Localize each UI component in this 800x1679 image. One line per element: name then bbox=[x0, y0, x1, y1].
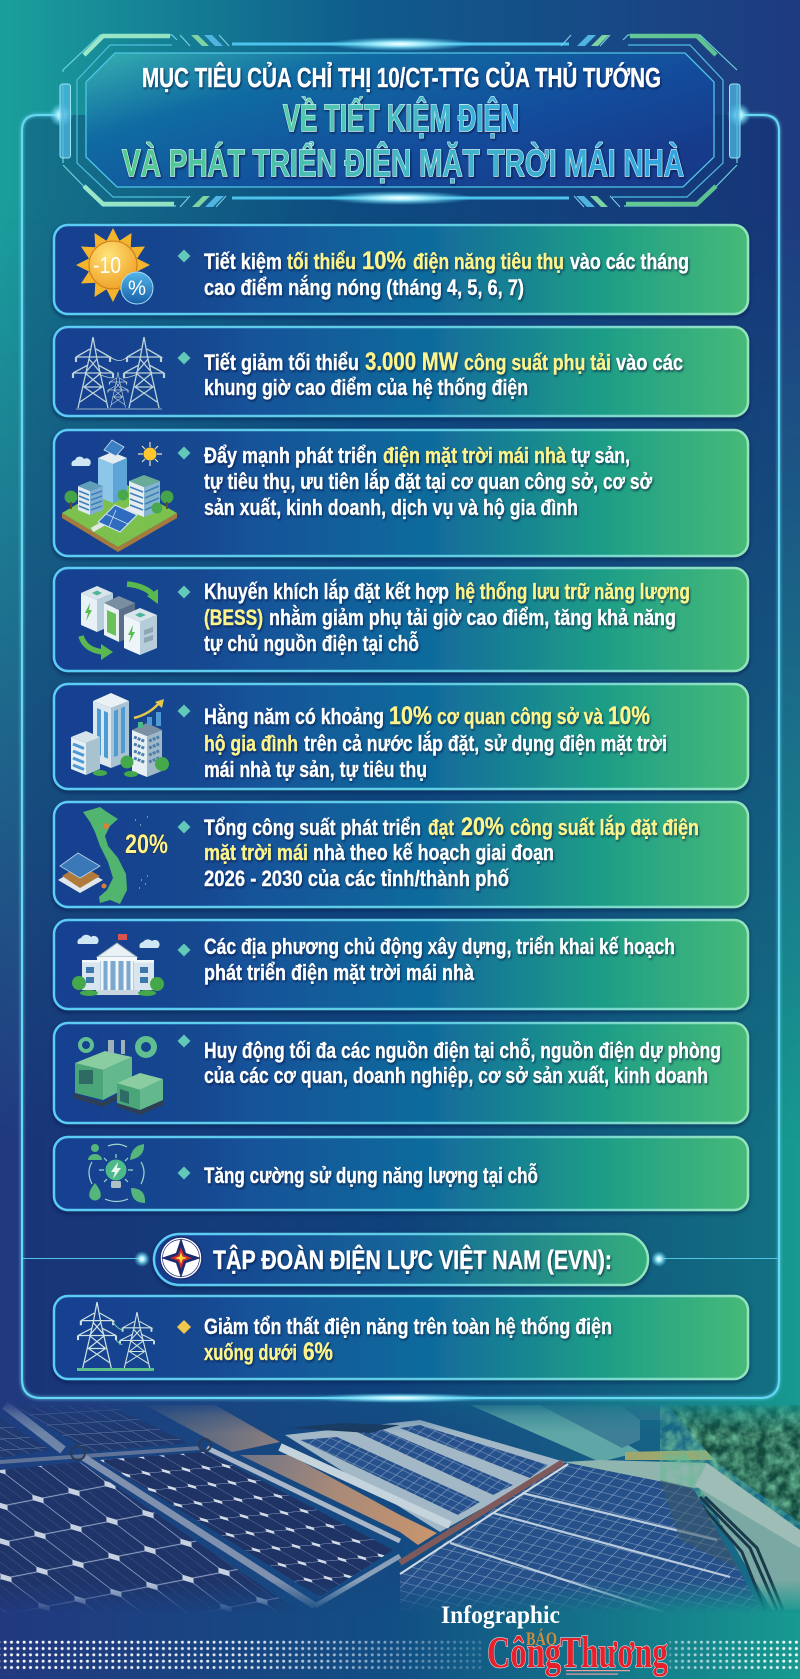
icon: transmission towers bbox=[77, 1302, 154, 1371]
icon: office buildings with growth arrow bbox=[71, 693, 169, 777]
decorative dot band bbox=[0, 1639, 800, 1671]
panel: card 7 bbox=[54, 920, 748, 1009]
icon: sun -10% bbox=[76, 228, 153, 304]
card text: vào các tháng bbox=[570, 249, 689, 274]
card text: tối thiểu bbox=[287, 249, 356, 274]
card text: Tiết kiệm bbox=[204, 249, 282, 274]
card text: 20% bbox=[461, 813, 504, 841]
logo: Báo Công Thương: Thương bbox=[560, 1628, 668, 1677]
card text: hộ gia đình bbox=[204, 731, 298, 756]
card text: khung giờ cao điểm của hệ thống điện bbox=[204, 375, 528, 400]
icon: Vietnam map with house bbox=[58, 807, 168, 904]
card text: (BESS) bbox=[204, 605, 263, 630]
card text: Tăng cường sử dụng năng lượng tại chỗ bbox=[204, 1163, 538, 1188]
panel: card 1 bbox=[54, 225, 748, 314]
card text: nhằm giảm phụ tải giờ cao điểm, tăng khả năng bbox=[269, 605, 676, 630]
logo: Báo Công Thương bbox=[487, 1628, 668, 1677]
bullet bbox=[178, 704, 190, 718]
header slashes bbox=[180, 35, 620, 207]
panel: card 10 bbox=[54, 1296, 748, 1379]
card text: công suất lắp đặt điện bbox=[510, 815, 699, 840]
header panel bbox=[86, 53, 714, 187]
card text: mặt trời mái bbox=[204, 840, 308, 865]
bullet bbox=[178, 586, 190, 598]
card text: Hằng năm có khoảng bbox=[204, 704, 384, 729]
icon: generators bbox=[73, 1039, 163, 1115]
card text: 10% bbox=[362, 247, 406, 275]
card text: Đẩy mạnh phát triển bbox=[204, 443, 377, 468]
title line 2: VỀ TIẾT KIỆM ĐIỆN bbox=[283, 96, 519, 140]
card text: điện năng tiêu thụ bbox=[413, 249, 564, 274]
card text: đạt bbox=[428, 815, 454, 840]
card text: điện mặt trời mái nhà bbox=[383, 443, 566, 468]
EVN heading text: TẬP ĐOÀN ĐIỆN LỰC VIỆT NAM (EVN): bbox=[213, 1244, 612, 1275]
card text: trên cả nước lắp đặt, sử dụng điện mặt trời bbox=[304, 731, 667, 756]
bullet bbox=[178, 944, 190, 956]
card text bbox=[204, 702, 667, 782]
card text: Khuyến khích lắp đặt kết hợp bbox=[204, 579, 449, 604]
bullet bbox=[178, 446, 190, 460]
panel: card 6 bbox=[54, 802, 748, 907]
card text: Tiết giảm tối thiểu bbox=[204, 350, 359, 375]
icon: EVN logo bbox=[160, 1237, 202, 1279]
card text: mái nhà tự sản, tự tiêu thụ bbox=[204, 757, 427, 782]
card text bbox=[204, 247, 689, 300]
card text bbox=[204, 813, 699, 891]
logo: Báo Công Thương: Công bbox=[487, 1628, 561, 1677]
card text: Các địa phương chủ động xây dựng, triển khai kế hoạch bbox=[204, 934, 675, 959]
card text: vào các bbox=[616, 350, 683, 375]
card text: hệ thống lưu trữ năng lượng bbox=[455, 579, 690, 604]
panel: card 3 bbox=[54, 430, 748, 556]
bullet bbox=[177, 1320, 191, 1334]
header frame bbox=[60, 35, 740, 207]
header green bands bbox=[84, 36, 716, 204]
panel: card 4 bbox=[54, 568, 748, 671]
icon: sun -10%: -10 bbox=[93, 252, 121, 278]
bullet bbox=[178, 1034, 190, 1048]
panel: card 2 bbox=[54, 327, 748, 416]
card text: xuống dưới bbox=[204, 1340, 297, 1365]
header thin outline bbox=[77, 45, 723, 197]
icon: battery storage bbox=[81, 584, 158, 660]
section heading: EVN bbox=[23, 1234, 778, 1285]
bullet bbox=[178, 1166, 190, 1180]
panel: card 8 bbox=[54, 1023, 748, 1123]
card text: 3.000 MW bbox=[365, 348, 458, 376]
card text: phát triển điện mặt trời mái nhà bbox=[204, 960, 474, 985]
card text bbox=[204, 443, 652, 520]
card text bbox=[204, 579, 690, 656]
title bbox=[122, 61, 684, 185]
header side capsules bbox=[60, 84, 740, 158]
icon: government building bbox=[72, 934, 164, 996]
panel: card 5 bbox=[54, 684, 748, 789]
card text: 10% bbox=[389, 702, 432, 730]
main frame bbox=[22, 103, 779, 1403]
card text: tự chủ nguồn điện tại chỗ bbox=[204, 631, 419, 656]
card text bbox=[204, 1314, 612, 1366]
icon: city with solar bbox=[62, 440, 177, 552]
card text: Giảm tổn thất điện năng trên toàn hệ thống điện bbox=[204, 1314, 612, 1339]
card text: công suất phụ tải bbox=[464, 350, 611, 375]
card text: cơ quan công sở và bbox=[437, 704, 603, 729]
panel: card 9 bbox=[54, 1137, 748, 1210]
icon: Vietnam map with house: 20% bbox=[125, 829, 168, 859]
icon: green bulb cycle bbox=[88, 1144, 145, 1203]
card text: 2026 - 2030 của các tỉnh/thành phố bbox=[204, 866, 509, 891]
card text: tự tiêu thụ, ưu tiên lắp đặt tại cơ quan công sở, cơ sở bbox=[204, 469, 652, 494]
footer label: Infographic: Infographic bbox=[441, 1602, 560, 1629]
photo: rooftop solar panels bbox=[0, 1405, 800, 1620]
card text bbox=[204, 1038, 721, 1088]
icon: sun -10%: % bbox=[128, 277, 146, 300]
logo: Báo Công Thương: BÁO bbox=[526, 1628, 557, 1650]
card text bbox=[204, 934, 675, 985]
card text: tự sản, bbox=[571, 443, 630, 468]
bullet bbox=[178, 250, 190, 262]
card text: 10% bbox=[608, 702, 650, 730]
card text: nhà theo kế hoạch giai đoạn bbox=[313, 840, 554, 865]
card text: 6% bbox=[303, 1338, 333, 1366]
header top and bottom bars bbox=[232, 37, 569, 205]
icon: power pylons bbox=[73, 337, 164, 409]
card text: Tổng công suất phát triển bbox=[204, 815, 421, 840]
card text bbox=[204, 348, 683, 400]
bullet bbox=[178, 820, 190, 834]
bullet bbox=[178, 352, 190, 364]
card text: cao điểm nắng nóng (tháng 4, 5, 6, 7) bbox=[204, 275, 524, 300]
card text: sản xuất, kinh doanh, dịch vụ và hộ gia đình bbox=[204, 495, 578, 520]
header corner bands bbox=[63, 35, 737, 206]
